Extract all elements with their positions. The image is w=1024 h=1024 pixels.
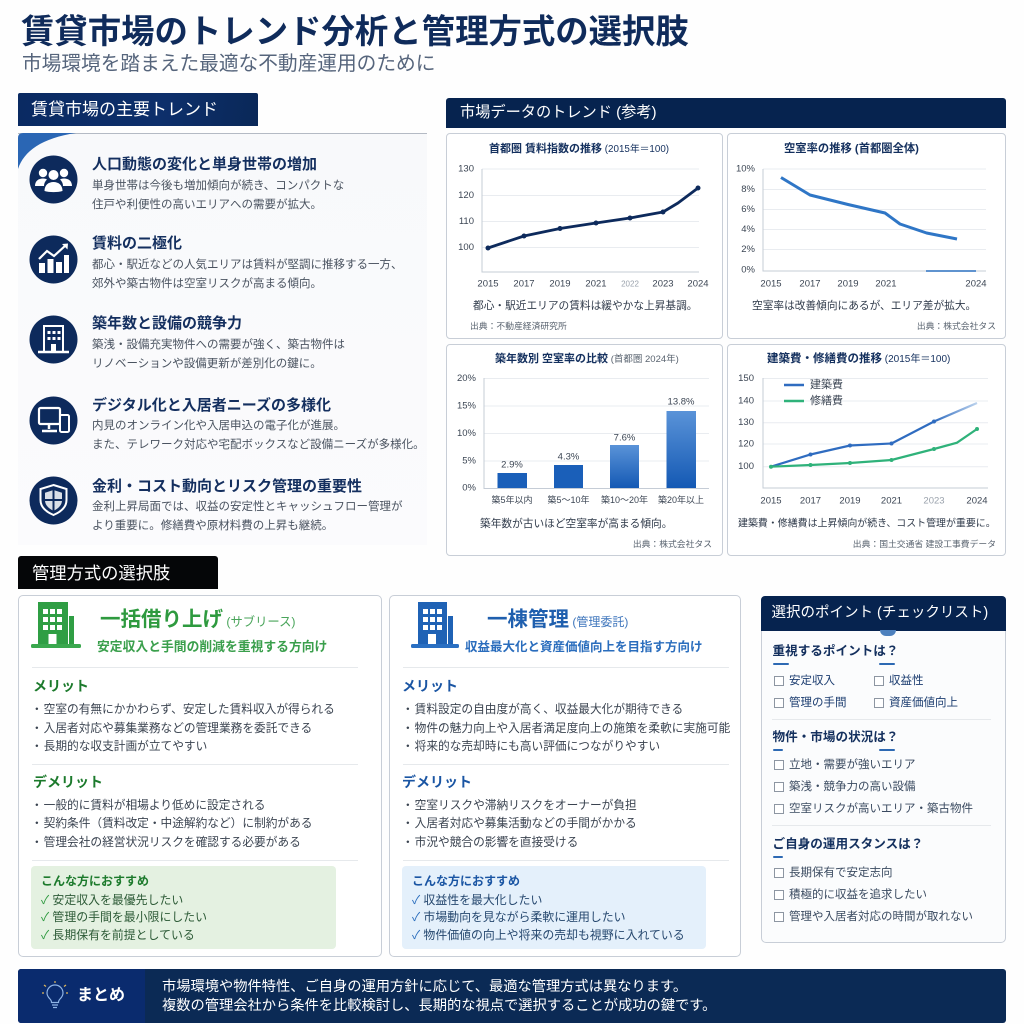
line chart: rent index: 110 [459,216,474,227]
chart title: 築年数別 空室率の比較 (首都圏 2024年) [495,351,679,365]
line chart: costs: 2021 [881,496,902,506]
icon: devices [30,396,78,444]
merits list: ・ 空室の有無にかかわらず、安定した賃料収入が得られる [31,703,335,716]
chart panel: rent index [446,133,723,339]
merits heading: メリット [33,678,89,694]
group 2 options: 築浅・競争力の高い設備 [789,781,916,793]
checklist header: 選択のポイント (チェックリスト) [772,604,988,620]
heading: main trends: 賃貸市場の主要トレンド [31,100,218,119]
line chart: rent index: 120 [458,190,474,201]
icon: rising chart [30,236,78,284]
icon: blue building [411,602,459,648]
recommendation box: ✓ 市場動向を見ながら柔軟に運用したい [412,910,626,924]
option subtitle: 収益最大化と資産価値向上を目指す方向け [465,640,703,654]
recommendation box: ✓ 管理の手間を最小限にしたい [41,910,207,924]
chart legend: 修繕費 [810,393,843,407]
trend item 4 [30,396,425,450]
summary label [18,969,145,1023]
chart panel: vacancy rate [727,133,1006,339]
trend heading: デジタル化と入居者ニーズの多様化 [92,397,331,414]
demerits list: ・ 市況や競合の影響を直接受ける [402,836,578,849]
bar chart: vacancy by age: 5% [462,456,477,466]
heading: management options [18,556,218,589]
demerits list: ・ 一般的に賃料が相場より低めに設定される [31,799,266,812]
group 3 options: 長期保有で安定志向 [789,867,892,879]
trend heading: 人口動態の変化と単身世帯の増加 [92,156,317,173]
demerits list: ・ 空室リスクや滞納リスクをオーナーが負担 [402,799,637,812]
bar chart: vacancy by age: 7.6% [614,432,636,444]
demerits list: ・ 契約条件（賃料改定・中途解約など）に制約がある [31,817,312,830]
line chart: rent index: 2015 [477,278,499,290]
recommendation box: ✓ 収益性を最大化したい [412,893,542,907]
merits list: ・ 物件の魅力向上や入居者満足度向上の施策を柔軟に実施可能 [402,722,730,735]
line chart: rent index: 130 [458,164,474,174]
trend heading: 賃料の二極化 [92,235,182,252]
group 1 options: 収益性 [889,675,924,687]
line chart: vacancy rate: 2024 [965,278,987,290]
chart panel: construction and repair cost [727,344,1006,556]
icon: people [30,156,78,204]
demerits list [402,798,637,849]
group 3 options: 積極的に収益を追求したい [789,889,927,901]
merits list: ・ 将来的な売却時にも高い評価につながりやすい [402,740,660,753]
line chart: vacancy rate: 8% [741,184,756,195]
group heading: 重視するポイントは？ [772,644,898,658]
line chart: costs: 2015 [760,496,782,506]
trend description: 単身世帯は今後も増加傾向が続き、コンパクトな [92,180,344,192]
chart caption: 都心・駅近エリアの賃料は緩やかな上昇基調。 [473,299,697,312]
chart source: 出典：不動産経済研究所 [470,320,567,331]
trend item 5 [30,476,402,532]
demerits list [31,798,312,849]
line chart: vacancy rate: 4% [741,224,756,235]
bar chart: vacancy by age [457,373,709,505]
chart legend [784,377,843,407]
chart caption: 空室率は改善傾向にあるが、エリア差が拡大。 [752,299,976,312]
bar chart: vacancy by age: 築20年以上 [658,494,704,505]
group 2 options: 立地・需要が強いエリア [789,759,916,771]
bar chart: vacancy by age: 築5年以内 [491,494,533,505]
line chart: rent index: 2019 [549,278,571,290]
line chart: vacancy rate: 2019 [837,278,859,290]
summary text: 市場環境や物件特性、ご自身の運用方針に応じて、最適な管理方式は異なります。 [162,979,687,995]
bar chart: vacancy by age: 13.8% [668,396,695,408]
line chart: rent index [458,164,709,290]
option title: 一括借り上げ (サブリース) [100,608,295,631]
bar chart: vacancy by age: 15% [457,400,477,412]
group 1 options: 資産価値向上 [889,697,958,709]
group 1 options [773,663,958,709]
group 2 options [773,749,973,815]
subtitle: 市場環境を踏まえた最適な不動産運用のために [22,53,435,75]
panel: master lease [18,595,382,957]
icon: building [30,316,78,364]
icon: shield [30,476,78,524]
trend heading: 金利・コスト動向とリスク管理の重要性 [92,478,362,495]
line chart: costs: 2023 [923,496,945,506]
header notch [880,630,896,636]
group heading: 物件・市場の状況は？ [772,730,898,744]
recommendation box: ✓ 物件価値の向上や将来の売却も視野に入れている [412,928,685,942]
recommendation box: ✓ 長期保有を前提としている [41,928,195,942]
recommendation box [31,866,336,949]
trend description: 内見のオンライン化や入居申込の電子化が進展。 [92,420,345,432]
panel: selection checklist [761,596,1006,943]
recommendation box: ✓ 安定収入を最優先したい [41,893,183,907]
demerits heading: デメリット [33,774,103,790]
line chart: vacancy rate: 6% [741,204,756,215]
line chart: costs [738,373,988,506]
recommendation box: こんな方におすすめ [412,874,520,888]
line chart: costs: 2024 [966,496,988,506]
trend item 1 [30,156,344,210]
line chart: costs: 2019 [839,496,861,506]
icon: green building [31,602,81,648]
line chart: costs: 2017 [800,496,821,506]
trend description line 2: 郊外や築古物件は空室リスクが高まる傾向。 [92,278,322,290]
checklist header [760,596,1006,630]
line chart: vacancy rate: 2021 [875,278,897,290]
recommendation box: こんな方におすすめ [41,874,149,888]
merits list: ・ 賃料設定の自由度が高く、収益最大化が期待できる [402,703,683,716]
chart caption: 築年数が古いほど空室率が高まる傾向。 [480,517,672,530]
summary band [18,969,1006,1023]
line chart: costs: 130 [738,417,754,428]
chart caption: 建築費・修繕費は上昇傾向が続き、コスト管理が重要に。 [738,516,996,530]
trend description: 都心・駅近などの人気エリアは賃料が堅調に推移する一方、 [92,259,402,271]
bar chart: vacancy by age: 10% [457,428,477,439]
merits list: ・ 長期的な収支計画が立てやすい [31,740,207,753]
trend heading: 築年数と設備の競争力 [92,315,242,332]
option subtitle: 安定収入と手間の削減を重視する方向け [97,639,327,654]
chart title: 建築費・修繕費の推移 (2015年＝100) [767,351,950,365]
chart legend: 建築費 [810,377,843,391]
line chart: vacancy rate: 10% [736,164,756,174]
group 1 options: 安定収入 [789,675,835,687]
bar chart: vacancy by age: 4.3% [558,452,580,462]
heading: market data [446,98,1006,128]
line chart: rent index: 2023 [652,278,674,290]
bar chart: vacancy by age: 2.9% [501,460,523,470]
recommendation box [402,866,706,949]
trend description line 2: より重要に。修繕費や原材料費の上昇も継続。 [92,520,333,532]
trend description line 2: 住戸や利便性の高いエリアへの需要が拡大。 [92,198,322,210]
summary text: 複数の管理会社から条件を比較検討し、長期的な視点で選択することが成功の鍵です。 [162,998,716,1014]
chart panel: vacancy by building age [446,344,723,556]
line chart: rent index: 2017 [513,278,535,290]
line chart: costs: 140 [738,396,754,406]
group 2 options: 空室リスクが高いエリア・築古物件 [789,803,973,815]
chart source: 出典：株式会社タス [917,320,996,331]
chart source: 出典：株式会社タス [633,538,712,549]
line chart: vacancy rate: 2% [741,244,756,255]
line chart: rent index: 2022 [621,280,639,288]
bar chart: vacancy by age: 20% [457,373,477,384]
panel corner accent [18,133,76,169]
line chart: vacancy rate: 2017 [799,278,821,290]
title: 賃貸市場のトレンド分析と管理方式の選択肢 [21,14,689,51]
summary text [162,978,716,1014]
merits list [402,702,730,753]
trend description: 築浅・設備充実物件への需要が強く、築古物件は [92,339,345,351]
group 3 options: 管理や入居者対応の時間が取れない [789,911,973,923]
group heading: ご自身の運用スタンスは？ [772,837,923,851]
line chart: costs: 100 [738,461,754,472]
trend description line 2: また、テレワーク対応や宅配ボックスなど設備ニーズが多様化。 [92,438,425,450]
group 3 options [773,856,973,923]
bar chart: vacancy by age: 築10～20年 [601,494,648,505]
line chart: vacancy rate: 2015 [760,278,782,290]
demerits heading: デメリット [402,774,472,790]
bar chart: vacancy by age: 0% [462,482,477,494]
trend item 2 [30,235,402,290]
merits list: ・ 入居者対応や募集業務などの管理業務を委託できる [31,722,312,735]
icon: light bulb [42,981,68,1008]
trend description: 金利上昇局面では、収益の安定性とキャッシュフロー管理が [92,501,402,513]
heading: main trends [18,93,258,126]
chart title: 首都圏 賃料指数の推移 (2015年＝100) [489,141,669,155]
demerits list: ・ 入居者対応や募集活動などの手間がかかる [402,817,637,830]
heading: management options: 管理方式の選択肢 [32,563,170,583]
option title: 一棟管理 (管理委託) [487,608,628,631]
heading: market data: 市場データのトレンド (参考) [460,104,657,121]
chart source: 出典：国土交通省 建設工事費データ [853,538,996,549]
line chart: vacancy rate [736,164,987,290]
line chart: rent index: 2024 [687,278,709,290]
line chart: rent index: 2021 [585,278,607,290]
demerits list: ・ 管理会社の経営状況リスクを確認する必要がある [31,836,301,849]
trend description line 2: リノベーションや設備更新が差別化の鍵に。 [92,358,322,370]
line chart: rent index: 100 [458,242,474,253]
panel: full building management [389,595,741,957]
line chart: vacancy rate: 0% [741,264,756,276]
line chart: costs: 150 [738,373,754,384]
label text: まとめ [77,987,125,1004]
chart title: 空室率の推移 (首都圏全体) [784,141,919,155]
merits heading: メリット [402,678,458,694]
line chart: costs: 120 [738,438,754,450]
bar chart: vacancy by age: 築5～10年 [547,494,590,505]
trend item 3 [30,315,345,370]
group 1 options: 管理の手間 [789,697,846,709]
merits list [31,702,335,753]
panel: market trends [18,133,427,545]
